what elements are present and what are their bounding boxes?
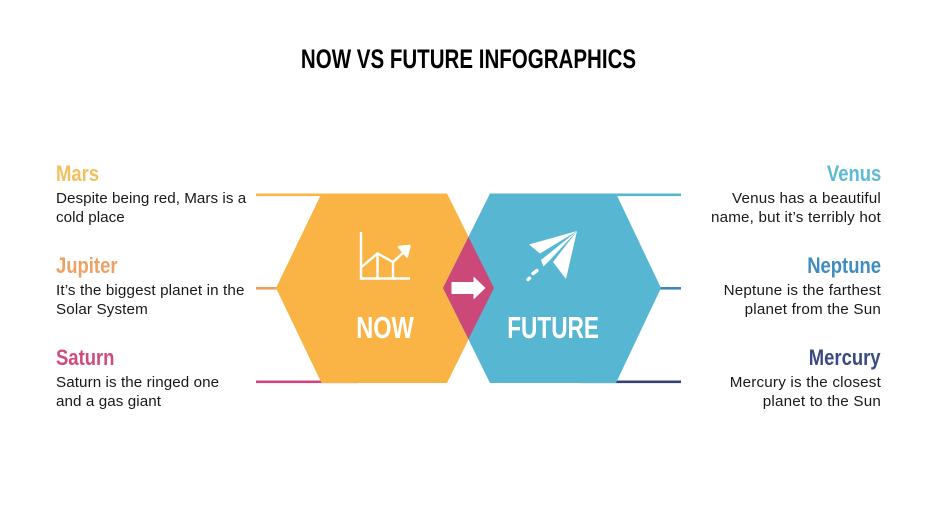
- label: NOW: NOW: [356, 310, 414, 345]
- text block: Neptune: [724, 253, 881, 318]
- text block: Saturn: Saturn is the ringed one: [56, 374, 219, 391]
- text block: Mars: [56, 161, 246, 226]
- text block: Saturn: Saturn: [56, 345, 114, 370]
- text block: Jupiter: It’s the biggest planet in the: [56, 282, 245, 299]
- connector: Mercury line: [580, 380, 681, 383]
- text block: Neptune: Neptune is the farthest: [724, 282, 881, 299]
- overlap diamond: [443, 237, 494, 339]
- text block: Mars: Mars: [56, 161, 99, 186]
- text block: Mars: Despite being red, Mars is a: [56, 190, 246, 207]
- text block: Neptune: planet from the Sun: [745, 300, 881, 318]
- hexagon: now: [276, 194, 494, 383]
- text block: Jupiter: Solar System: [56, 300, 148, 318]
- connector: Venus line: [612, 194, 681, 196]
- hexagon: future: [443, 194, 661, 383]
- icon: paper plane: [528, 231, 577, 280]
- connector: Jupiter line: [256, 287, 278, 290]
- text block: Jupiter: [56, 253, 245, 318]
- text block: Mercury: planet to the Sun: [763, 392, 881, 410]
- connector: Saturn line: [256, 380, 358, 383]
- text block: Saturn: and a gas giant: [56, 392, 161, 410]
- text block: Mercury: Mercury: [809, 345, 881, 370]
- text block: Jupiter: Jupiter: [56, 253, 118, 278]
- icon: white arrow: [452, 276, 486, 300]
- text block: Mercury: Mercury is the closest: [730, 374, 881, 391]
- text block: Mercury: [730, 345, 881, 410]
- text block: Venus: name, but it’s terribly hot: [711, 208, 881, 226]
- text block: Venus: Venus: [827, 161, 881, 186]
- label: FUTURE: FUTURE: [507, 310, 598, 345]
- text block: Venus: [711, 161, 881, 226]
- title: NOW VS FUTURE INFOGRAPHICS: [301, 44, 636, 74]
- text block: Mars: cold place: [56, 208, 125, 226]
- icon: growth chart: [361, 232, 410, 278]
- text block: Venus: Venus has a beautiful: [732, 190, 881, 207]
- connector: Neptune line: [659, 287, 681, 290]
- text block: Neptune: Neptune: [807, 253, 881, 278]
- text block: Saturn: [56, 345, 219, 410]
- connector: Mars line: [256, 194, 326, 196]
